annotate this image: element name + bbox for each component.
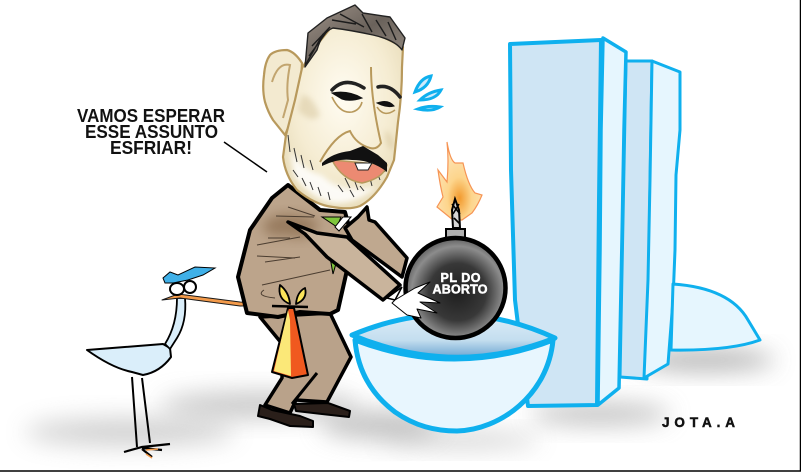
face xyxy=(283,25,403,208)
sweat drops xyxy=(415,76,441,110)
eyes xyxy=(332,92,394,107)
bomb label: ABORTO xyxy=(432,282,488,296)
eyebrows xyxy=(332,82,400,97)
man: shirt xyxy=(335,217,351,231)
speech text: ESSE ASSUNTO xyxy=(85,122,218,142)
ground shadows xyxy=(25,350,775,448)
speech text: ESFRIAR! xyxy=(110,138,192,158)
cheek shading xyxy=(298,95,394,150)
stork body xyxy=(87,344,171,375)
bundle held by beak xyxy=(272,285,308,378)
stork eyes xyxy=(170,281,196,295)
bundle strap xyxy=(272,306,308,307)
teeth xyxy=(355,163,372,170)
stork feet xyxy=(124,444,170,458)
bomb label xyxy=(432,271,488,296)
artist signature: JOTA.A xyxy=(662,415,735,430)
flame xyxy=(437,142,482,220)
man: trousers xyxy=(260,313,351,413)
eye bags xyxy=(332,97,395,113)
stork cap xyxy=(163,267,215,283)
bowl xyxy=(352,314,555,431)
side hair strokes xyxy=(306,14,396,64)
speech pointer line xyxy=(224,142,267,172)
fuse xyxy=(452,199,460,228)
tower: front block xyxy=(510,38,626,406)
speech text: VAMOS ESPERAR xyxy=(77,106,225,126)
man: hand xyxy=(387,282,440,318)
stubble xyxy=(288,135,385,200)
bomb label: PL DO xyxy=(440,271,481,285)
moustache xyxy=(322,146,387,172)
stork xyxy=(87,267,290,458)
man: far arm xyxy=(345,207,407,277)
man: near arm xyxy=(288,222,400,300)
stork beak xyxy=(162,294,290,306)
man: tie xyxy=(322,217,341,274)
bomb xyxy=(406,142,506,338)
bundle cloth xyxy=(272,308,308,378)
man: jacket wrinkles xyxy=(257,207,330,298)
nose and cheek line xyxy=(320,67,381,162)
man: shoes xyxy=(258,403,350,427)
bundle knot xyxy=(279,285,306,304)
stork neck xyxy=(165,298,185,349)
hair xyxy=(305,5,405,67)
man: trouser crease xyxy=(292,373,317,404)
tower: half dome xyxy=(671,284,760,350)
mouth xyxy=(332,160,387,183)
man: head xyxy=(283,5,405,208)
stork legs xyxy=(132,377,150,447)
bomb cap xyxy=(446,229,465,238)
speech text xyxy=(77,106,225,158)
jacket shading xyxy=(262,214,320,238)
beard shading xyxy=(290,150,378,203)
man: jacket xyxy=(238,185,350,317)
man: ear xyxy=(263,50,302,135)
tower: back block xyxy=(620,61,680,379)
bomb sphere xyxy=(406,238,506,338)
